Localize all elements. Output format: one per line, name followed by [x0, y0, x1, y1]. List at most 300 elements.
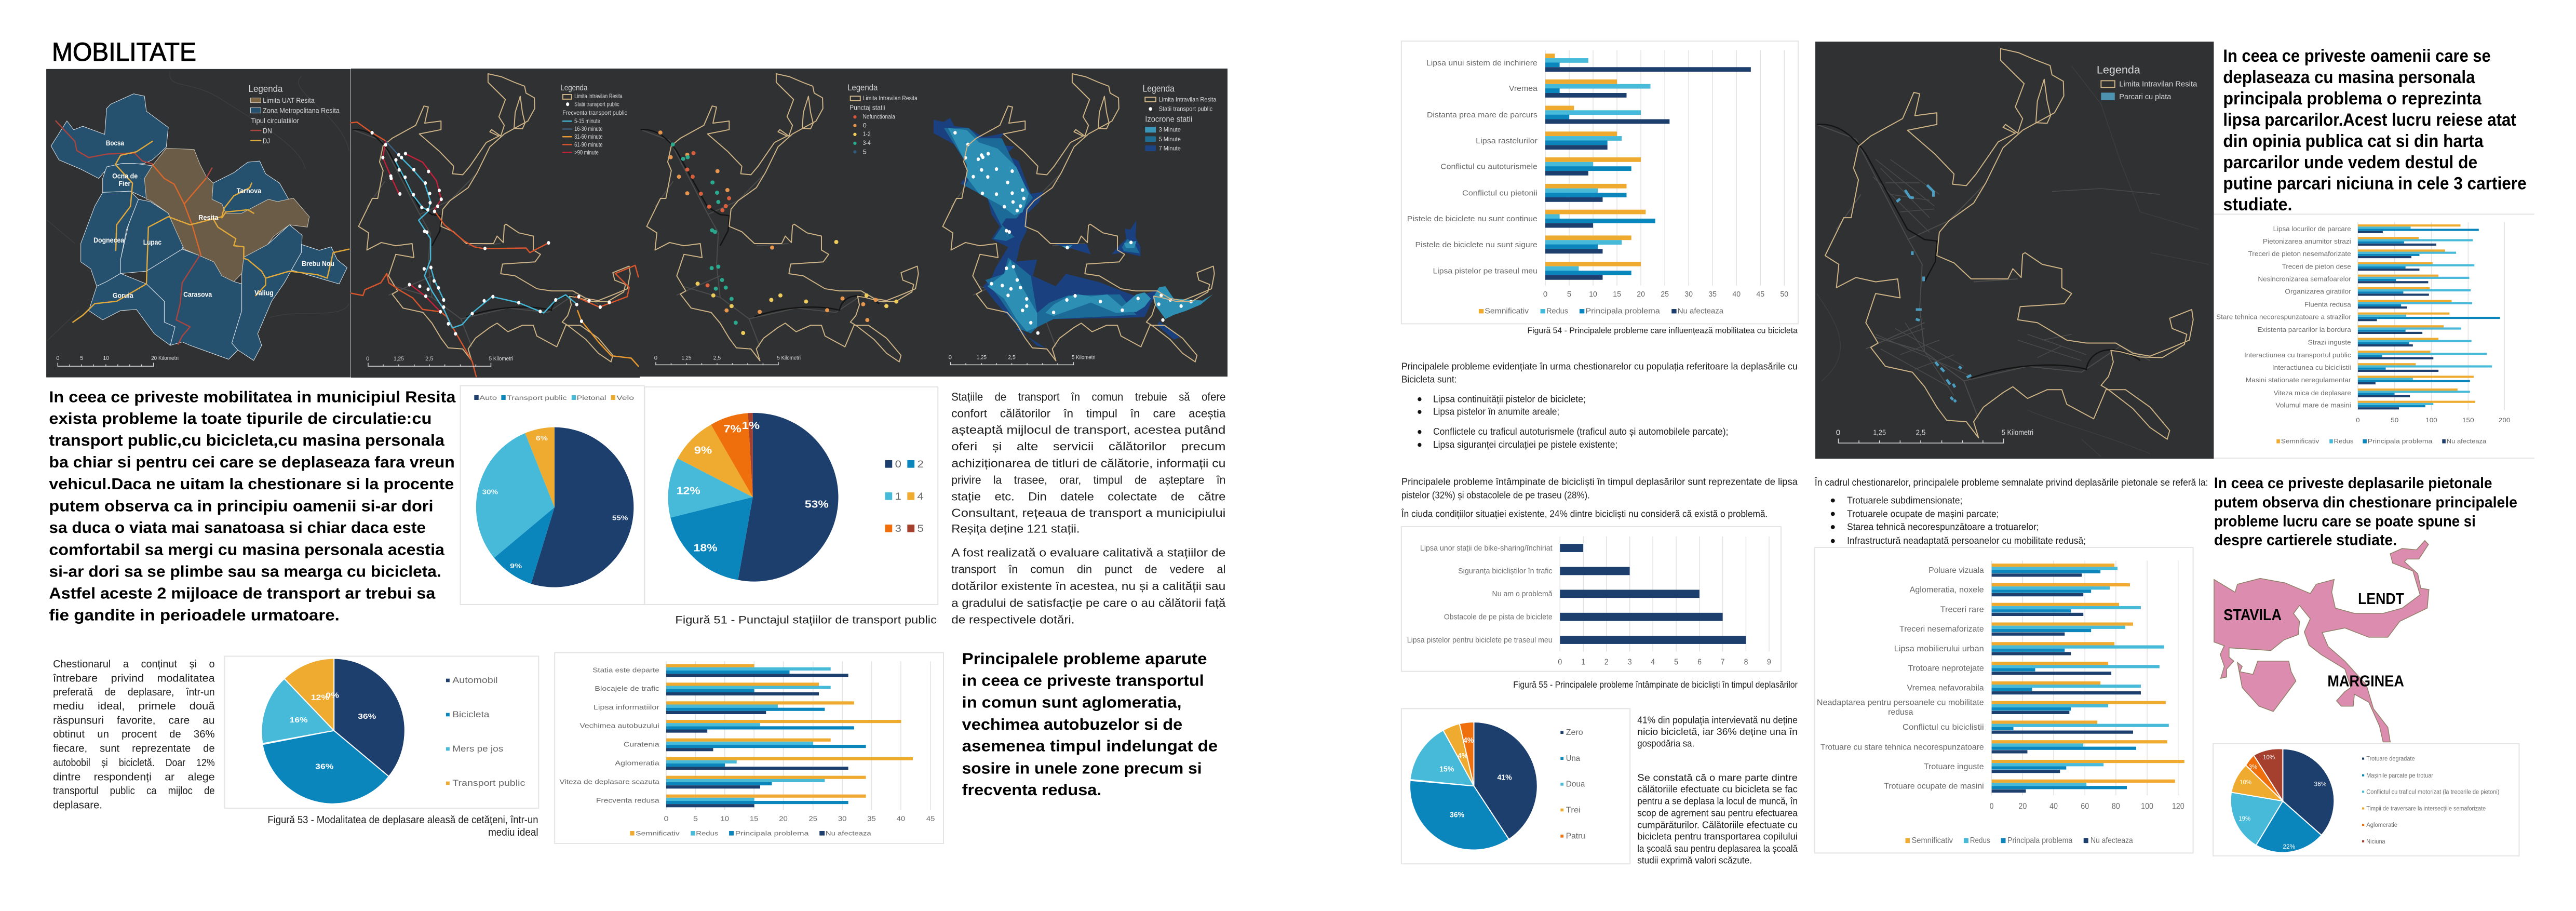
bar chart: public transport problems: 45 [926, 815, 935, 823]
text: in comun sunt aglomeratia, [962, 693, 1182, 712]
category labels: Treceri de pieton dese [2282, 263, 2351, 270]
legend: Timpii de traversare la intersecțiile semaforizate [2366, 806, 2486, 812]
text block: pedestrian movement: putem observa din chestionare principalele [2214, 494, 2517, 511]
legend: 16-30 minute [574, 126, 603, 132]
category labels: Lipsa unui sistem de inchiriere [1426, 58, 1537, 67]
map panel: UAT Resita and road types [46, 69, 350, 378]
percent labels: 3% [2249, 763, 2257, 771]
category labels: Treceri de pieton nesemaforizate [2248, 250, 2351, 258]
text: Stațiile de transport în comun trebuie să ofere [951, 391, 1225, 404]
text: achiziționarea de titluri de călătorie, informații cu [951, 457, 1225, 470]
isochrone 3 minutes [948, 128, 1213, 331]
bullet list: Lipsa continuității pistelor de biciclete; [1433, 394, 1586, 405]
isochrone 5 minutes [944, 128, 1140, 333]
scale bar: 1,25 [1873, 428, 1886, 437]
axis labels: 2 [1604, 657, 1609, 666]
category labels: Nesincronizarea semafoarelor [2258, 275, 2351, 283]
axis labels: 35 [1708, 290, 1717, 298]
caption [267, 814, 538, 838]
axis labels: 1 [1581, 657, 1585, 666]
pie slices [476, 427, 633, 587]
category labels: Treceri rare [1940, 606, 1984, 614]
scale bar [1836, 428, 2033, 443]
scale bar: 10 [103, 355, 109, 361]
scale bar [949, 354, 1096, 365]
text block: bicycle ownership: nicio bicicletă, iar 36% deține una în [1637, 727, 1798, 738]
percent labels: 4% [1458, 752, 1468, 760]
percent labels: 36% [315, 762, 333, 771]
category labels: Pistele de biciclete nu sunt continue [1407, 215, 1537, 223]
neighbourhood shape [2214, 541, 2429, 742]
locality labels: Tarnova [237, 187, 262, 195]
legend: Redus [1970, 836, 1990, 845]
axis labels: 8 [1744, 657, 1748, 666]
category labels [559, 666, 659, 804]
pie slices [262, 659, 405, 804]
percent labels: 30% [482, 488, 498, 496]
text: fiecare, sunt reprezentate de [53, 742, 215, 754]
legend [474, 394, 634, 401]
territory polygons [51, 94, 347, 360]
legend: Bicicleta [452, 709, 490, 719]
category labels: Pietonizarea anumitor strazi [2263, 238, 2351, 245]
text: privire la trasee, orar, timpul de așteptare în [951, 474, 1225, 487]
locality labels: Lupac [143, 238, 161, 247]
text: transportul public ca mijloc de [53, 785, 215, 796]
pie chart: bicycles per household with caption and text [1401, 679, 1798, 866]
text: sa duca o viata mai sanatoasa si chiar daca este [49, 518, 426, 537]
pie chart: station scores: 4 [917, 491, 924, 502]
legend: Semnificativ [1911, 836, 1953, 845]
category labels: Fluenta redusa [2304, 301, 2351, 308]
pie chart: station scores: 2 [917, 459, 924, 470]
pie chart: modal split: 55% [612, 514, 628, 522]
legend [630, 829, 871, 837]
category labels: Poluare vizuala [1928, 566, 1984, 575]
legend: Punctaj statii [849, 104, 885, 111]
text block: cycling issues [1401, 361, 1798, 519]
legend: Mers pe jos [452, 744, 503, 754]
legend: DJ [263, 137, 270, 145]
percent labels: 16% [289, 715, 308, 724]
axis labels: 5 [1674, 657, 1678, 666]
map panel: station isochrones: Statii transport public [1159, 105, 1212, 113]
text: confort călătorilor în timpul în care aceștia [951, 407, 1226, 420]
legend: Frecventa transport public [562, 110, 627, 116]
axis labels: 5 [1567, 290, 1571, 298]
legend: 31-60 minute [574, 133, 603, 140]
legend [2362, 756, 2500, 845]
axis labels: 15 [750, 815, 758, 823]
percent labels: 6% [536, 435, 548, 442]
axis labels: 0 [1543, 290, 1547, 298]
axis labels: 40 [1732, 290, 1741, 298]
category labels: Lipsa locurilor de parcare [2273, 225, 2351, 233]
pie chart: station scores: 5 [917, 523, 924, 534]
scale bar: 0 [654, 355, 657, 361]
text: dintre respondenți ar alege [53, 771, 215, 783]
bars [1545, 53, 1751, 280]
axis labels [2356, 417, 2510, 424]
percent labels [289, 691, 376, 771]
bullet list [1831, 495, 2086, 546]
legend: Izocrone statii [1145, 114, 1192, 124]
legend: 7 Minute [1159, 145, 1181, 152]
category labels: Siguranța bicicliștilor în trafic [1458, 567, 1553, 575]
category labels: Volumul mare de masini [2275, 401, 2351, 409]
text: asemenea timpul indelungat de [962, 737, 1218, 755]
legend: 5 [863, 149, 867, 155]
text block: bicycle ownership: scop de agrement sau pentru efectuarea [1637, 808, 1798, 819]
bullet list: Lipsa pistelor în anumite areale; [1433, 407, 1559, 417]
axis labels: 0 [664, 815, 669, 823]
gridlines [1992, 560, 2178, 795]
percent labels: 7% [723, 423, 741, 435]
axis labels [1990, 801, 2184, 811]
legend [2097, 64, 2197, 101]
scale bar: 1,25 [394, 356, 404, 362]
legend: 3 [895, 523, 901, 534]
isochrone 7 minutes [934, 118, 1180, 348]
bullet list: Starea tehnică necorespunzătoare a trotuarelor; [1847, 521, 2039, 532]
caption: Figură 55 - Principalele probleme întâmpinate de bicicliști în timpul deplasărilor [1513, 679, 1798, 690]
axis labels: 7 [1721, 657, 1724, 666]
category labels: Conflictul cu pietonii [1462, 189, 1537, 197]
percent labels: 9% [694, 444, 712, 456]
category labels: Conflictul cu biciclistii [1903, 723, 1984, 732]
text: vehicul.Daca ne uitam la chestionare si la procente [49, 475, 454, 493]
roads [56, 121, 349, 344]
bar chart: public transport problems: Frecventa redusa [596, 797, 659, 804]
axis labels: 20 [2018, 801, 2027, 811]
bars [666, 664, 913, 807]
legend: Zero [1566, 728, 1583, 737]
text block: station comfort: oferi și alte servicii călătorilor precum [951, 440, 1225, 453]
legend: Principala problema [2368, 438, 2433, 445]
text block: pedestrian movement [2214, 475, 2517, 548]
scale bar: 1,25 [681, 355, 692, 361]
legend: Velo [616, 394, 634, 401]
legend: Nu afecteaza [1678, 306, 1723, 315]
percent labels [677, 419, 829, 554]
category labels: Lipsa pistelor pentru biciclete pe traseul meu [1407, 636, 1553, 645]
axis labels: 6 [1697, 657, 1702, 666]
neighbourhood labels: MARGINEA [2327, 673, 2404, 690]
text block: cycling issues: Principalele probleme întâmpinate de bicicliști în timpul deplasărilor sunt reprezentate de lipsa [1401, 477, 1798, 487]
axis labels: 4 [1651, 657, 1655, 666]
axis labels: 100 [2141, 801, 2153, 811]
percent labels: 36% [358, 712, 376, 720]
locality labels: Goruia [113, 291, 133, 300]
axis labels: 0 [1558, 657, 1562, 666]
axis labels: 15 [1613, 290, 1621, 298]
locality labels: Fier [118, 180, 130, 187]
legend: Patru [1566, 832, 1585, 840]
text: putem observa ca in principiu oamenii si-ar dori [49, 497, 433, 515]
category labels: Existenta parcarilor la bordura [2257, 326, 2351, 333]
legend: Limita Intravilan Resita [2119, 80, 2197, 88]
axis labels: 40 [2049, 801, 2058, 811]
scale bar: 5 Kilometri [489, 356, 513, 362]
legend [1906, 836, 2133, 845]
gridlines [2358, 222, 2504, 410]
category labels: Stare tehnica necorespunzatoare a strazilor [2216, 313, 2351, 320]
legend [446, 675, 525, 788]
text block: bicycle ownership [1637, 715, 1798, 866]
percent labels: 12% [311, 693, 329, 702]
scale bar: 0 [1836, 428, 1840, 437]
legend: Semnificativ [1485, 306, 1529, 315]
map panel: station isochrones: Limita Intravilan Resita [1159, 96, 1216, 103]
axis labels: 25 [1661, 290, 1669, 298]
text block: mobility in Resita [49, 387, 456, 624]
text block: bicycle ownership: gospodăria sa. [1637, 738, 1694, 749]
text: A fost realizată o evaluare calitativă a stațiilor de [951, 546, 1225, 559]
scale bar: 0 [949, 354, 952, 360]
percent labels: 15% [1439, 765, 1454, 773]
category labels: Treceri nesemaforizate [1899, 625, 1984, 634]
legend: Redus [696, 829, 718, 837]
bullet list [1418, 394, 1729, 450]
axis labels: 20 [779, 815, 788, 823]
text: preferată de deplasare, într-un [53, 686, 215, 698]
category labels: Curatenia [624, 741, 659, 748]
text: răspunsuri favorite, care au [53, 714, 215, 726]
legend: Principala problema [2007, 836, 2073, 845]
text block: station comfort: de respectivele dotări. [951, 613, 1075, 626]
category labels: Lipsa rastelurilor [1476, 136, 1537, 145]
text block: bicycle ownership: pentru a se deplasa la locul de muncă, în [1637, 796, 1798, 807]
scale bar: 2,5 [425, 356, 434, 362]
text: exista probleme la toate tipurile de circulatie:cu [49, 409, 431, 427]
legend: Niciuna [2366, 838, 2385, 845]
text block: pedestrian issues [1814, 477, 2208, 546]
category labels [2216, 225, 2351, 409]
scale bar: 2,5 [713, 355, 721, 361]
pie slices [1410, 722, 1537, 850]
legend: Parcari cu plata [2119, 92, 2172, 101]
legend: Transport public [507, 394, 567, 401]
text block: transit problems [962, 650, 1218, 799]
percent labels: 18% [694, 542, 718, 554]
text: dotărilor existente în acestea, nu și a calității sau [951, 580, 1225, 593]
legend: 1-2 [863, 130, 871, 137]
axis labels [1558, 657, 1771, 666]
axis labels: 80 [2112, 801, 2120, 811]
bar chart: car traffic problems [2214, 214, 2534, 458]
locality labels: Carasova [183, 291, 212, 299]
category labels [1407, 544, 1553, 645]
pie chart: preferred travel mode [225, 656, 538, 838]
axis labels: 9 [1767, 657, 1771, 666]
legend: Redus [1546, 306, 1568, 315]
scale bar [56, 355, 179, 366]
locality labels [93, 139, 334, 300]
legend: Transport public [452, 778, 525, 788]
text: vechimea autobuzelor si de [962, 716, 1182, 733]
legend: Aglomeratie [2366, 822, 2397, 828]
text: In ceea ce priveste mobilitatea in municipiul Resita [49, 387, 456, 406]
percent labels: 9% [510, 562, 522, 570]
legend: Principala problema [735, 829, 809, 837]
text block: station comfort: Consultant, rețeaua de transport a municipiului [951, 507, 1225, 519]
category labels: Viteza mica de deplasare [2274, 389, 2351, 397]
axis labels: 20 [1637, 290, 1645, 298]
legend: Auto [479, 394, 497, 401]
legend: Nu afecteaza [2447, 438, 2487, 445]
legend: Trotuare degradate [2366, 756, 2415, 762]
legend: Zona Metropolitana Resita [263, 107, 340, 115]
axis labels: 200 [2499, 417, 2510, 424]
text block: questionnaire: deplasare. [53, 799, 102, 811]
scale bar [366, 356, 513, 366]
text block: bicycle ownership: bicicleta pentru transportarea copilului [1637, 832, 1798, 842]
text: transport în comun din punct de vedere al [951, 563, 1225, 575]
axis labels [1543, 290, 1788, 298]
text: si-ar dori sa se plimbe sau sa mearga cu bicicleta. [49, 562, 441, 580]
legend: Legenda [2097, 64, 2140, 76]
locality labels: Bocsa [106, 139, 125, 148]
category labels: Interactiunea cu transportul public [2244, 351, 2351, 359]
percent labels: 12% [677, 485, 700, 497]
percent labels [2238, 754, 2326, 850]
bar chart: public transport problems: Vechimea autobuzului [579, 722, 659, 730]
gridlines [1545, 50, 1784, 286]
legend: 5 Minute [1159, 136, 1181, 143]
scale bar: 2,5 [1916, 428, 1925, 437]
legend: DN [263, 127, 272, 135]
legend: Doua [1566, 780, 1585, 788]
axis labels: 5 [693, 815, 698, 823]
legend [1142, 84, 1216, 152]
legend [885, 459, 924, 534]
percent labels [1439, 736, 1512, 819]
legend: 3-4 [863, 139, 871, 146]
legend: >90 minute [574, 150, 599, 156]
caption: Figură 54 - Principalele probleme care influențează mobilitatea cu bicicleta [1528, 326, 1798, 336]
category labels: Aglomeratia, noxele [1909, 586, 1984, 595]
category labels: Distanta prea mare de parcurs [1427, 111, 1537, 119]
parking lots [1897, 185, 1971, 402]
legend: Una [1566, 754, 1581, 763]
text block: pedestrian movement: despre cartierele studiate. [2214, 531, 2397, 548]
category labels: Lipsa pistelor pe traseul meu [1433, 266, 1537, 275]
text: ba chiar si pentru cei care se deplaseaza fara vreun [49, 453, 455, 471]
map panel: station scores [639, 69, 934, 377]
category labels: Lipsa mobilierului urban [1894, 645, 1984, 653]
locality labels: Resita [198, 213, 219, 222]
bars [1992, 564, 2184, 793]
legend: Nu afecteaza [826, 829, 871, 837]
text block: car users: studiate. [2223, 195, 2292, 215]
legend: Statii transport public [574, 101, 619, 108]
map panel: station scores: Limita Intravilan Resita [863, 95, 918, 102]
percent labels: 41% [1497, 773, 1512, 782]
legend: Conflictul cu traficul motorizat (la trecerile de pietoni) [2366, 789, 2500, 796]
routes [351, 122, 638, 377]
axis labels: 100 [2425, 417, 2437, 424]
category labels: Trotuare cu stare tehnica necorespunzatoare [1820, 743, 1984, 752]
axis labels: 40 [897, 815, 905, 823]
text block: bicycle ownership: 41% din populația intervievată nu deține [1637, 715, 1798, 726]
legend: Legenda [560, 83, 588, 92]
intravilan boundary on transport map [358, 74, 630, 362]
stops [953, 131, 1193, 335]
axis labels: 30 [838, 815, 846, 823]
legend: Nefunctionala [863, 113, 895, 120]
legend: Semnificativ [636, 829, 680, 837]
legend: Limita UAT Resita [263, 97, 315, 104]
legend: Legenda [249, 83, 283, 94]
bar chart: public transport problems: Statia este departe [592, 666, 659, 674]
pie chart: pedestrian issues [2213, 744, 2519, 856]
legend [847, 83, 918, 155]
axis labels: 60 [2081, 801, 2089, 811]
category labels: redusa [1888, 708, 1913, 717]
scale bar: 0 [56, 355, 60, 361]
legend: 5-15 minute [574, 118, 600, 125]
legend: 0 [863, 122, 867, 129]
axis labels: 0 [2356, 417, 2360, 424]
axis labels: 25 [808, 815, 817, 823]
text: comfortabil sa mergi cu masina personala acestia [49, 540, 444, 558]
bars [1560, 544, 1746, 644]
percent labels: 10% [2240, 779, 2251, 786]
category labels: Vremea nefavorabila [1907, 684, 1984, 692]
text: mediu ideal [488, 826, 538, 838]
category labels: Vremea [1509, 84, 1537, 93]
legend: Semnificativ [2281, 438, 2319, 445]
axis labels [664, 815, 935, 823]
pie chart: modal split [461, 386, 644, 605]
text block: cycling issues: pistelor (32%) și obstacolele de pe traseu (28%). [1401, 490, 1590, 501]
axis labels: 10 [1589, 290, 1597, 298]
category labels: Lipsa informatiilor [594, 704, 659, 711]
text: autobobil și bicicletă. Doar 12% [53, 757, 215, 768]
axis labels: 0 [1990, 801, 1993, 811]
text block: station comfort: așteaptă mijlocul de transport, acestea putând [951, 424, 1225, 436]
text: obtinut un procent de 36% [53, 728, 215, 740]
legend: Pietonal [577, 394, 606, 401]
percent labels: 1% [742, 419, 760, 432]
axis labels: 50 [1780, 290, 1788, 298]
text block: cycling issues: În ciuda condițiilor situației existente, 24% dintre bicicliști nu consideră că există o problemă. [1401, 509, 1768, 519]
station score dots [658, 130, 898, 335]
category labels: Trotuare inguste [1924, 762, 1984, 771]
category labels: Nu am o problemă [1492, 590, 1553, 598]
pie chart: station scores: 53% [805, 498, 829, 510]
category labels: Organizarea giratiilor [2285, 288, 2351, 296]
category labels: Trotuare ocupate de masini [1884, 782, 1984, 791]
locality labels: Valiug [254, 289, 274, 297]
legend: 1 [895, 491, 901, 502]
text block: mobility in Resita: fie gandite in perioadele urmatoare. [49, 606, 340, 624]
legend: Principala problema [1585, 306, 1660, 315]
legend: Tipul circulatiilor [251, 117, 299, 125]
gridlines [666, 661, 930, 810]
legend: Legenda [847, 83, 878, 92]
category labels: Blocajele de trafic [595, 685, 659, 692]
text: Astfel aceste 2 mijloace de transport ar trebui sa [49, 584, 436, 602]
scale bar [654, 355, 801, 365]
percent labels: 19% [2238, 815, 2250, 822]
map panel: public transport frequency background [351, 69, 640, 378]
percent labels: 10% [2263, 754, 2275, 761]
neighbourhood labels [2223, 591, 2404, 690]
text block: cycling issues: Principalele probleme evidențiate în urma chestionarelor cu populația referitoare la deplasările cu [1401, 361, 1798, 372]
text block: station comfort [951, 391, 1226, 626]
category labels: Strazi inguste [2308, 339, 2351, 346]
